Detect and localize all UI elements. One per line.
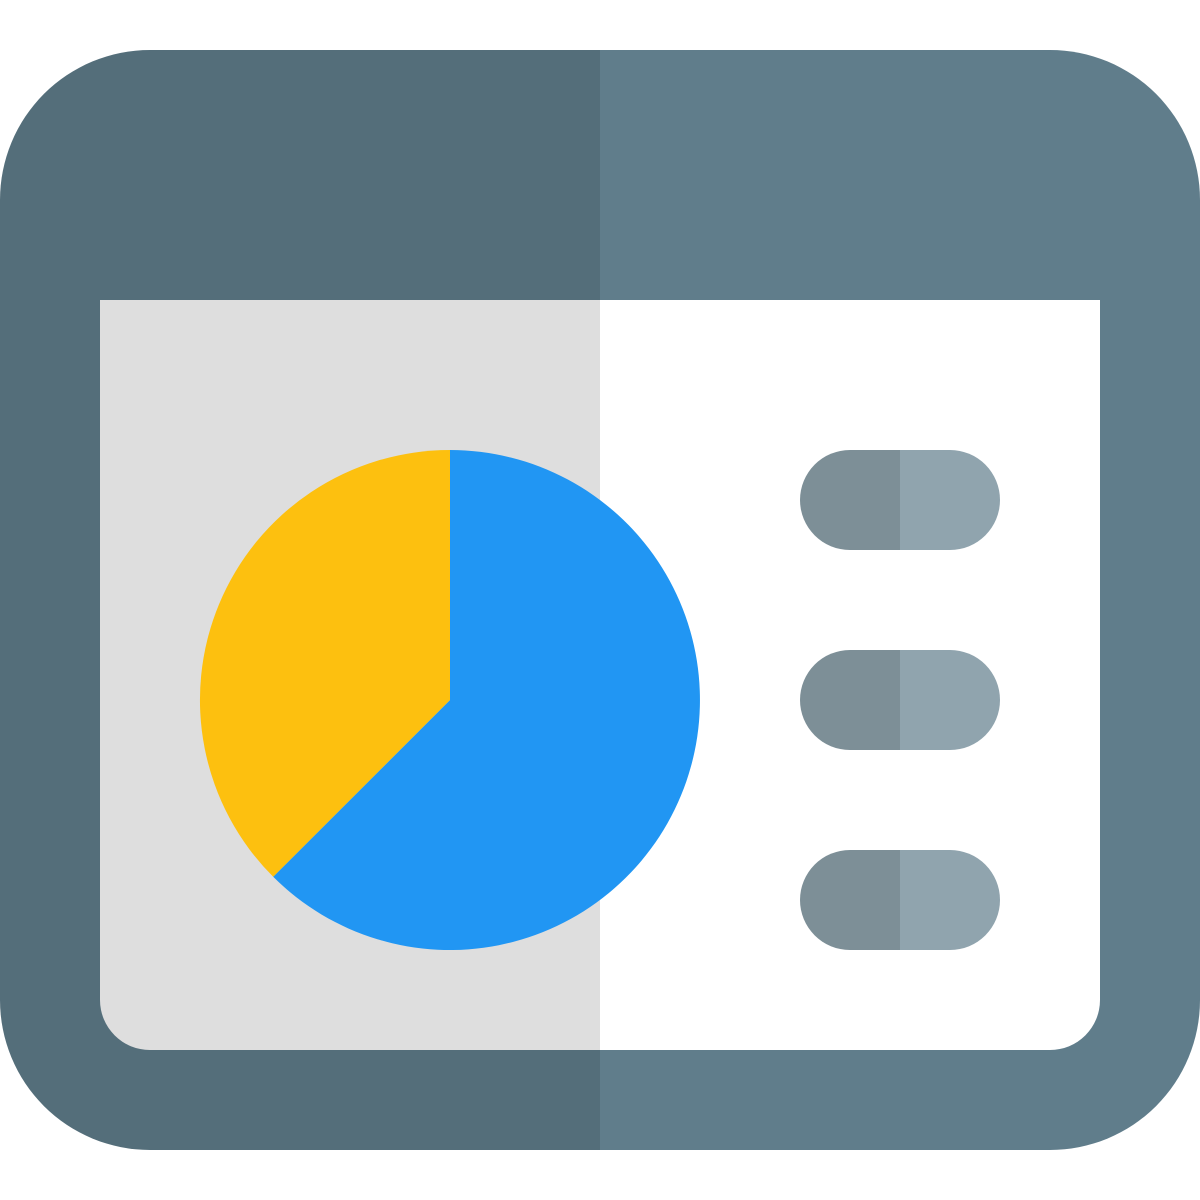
list item pill 1 — [800, 450, 1000, 550]
list item pill 2 — [800, 650, 1000, 750]
list item pill 3 — [800, 850, 1000, 950]
pie chart — [200, 450, 700, 950]
content panel — [100, 300, 1100, 1050]
